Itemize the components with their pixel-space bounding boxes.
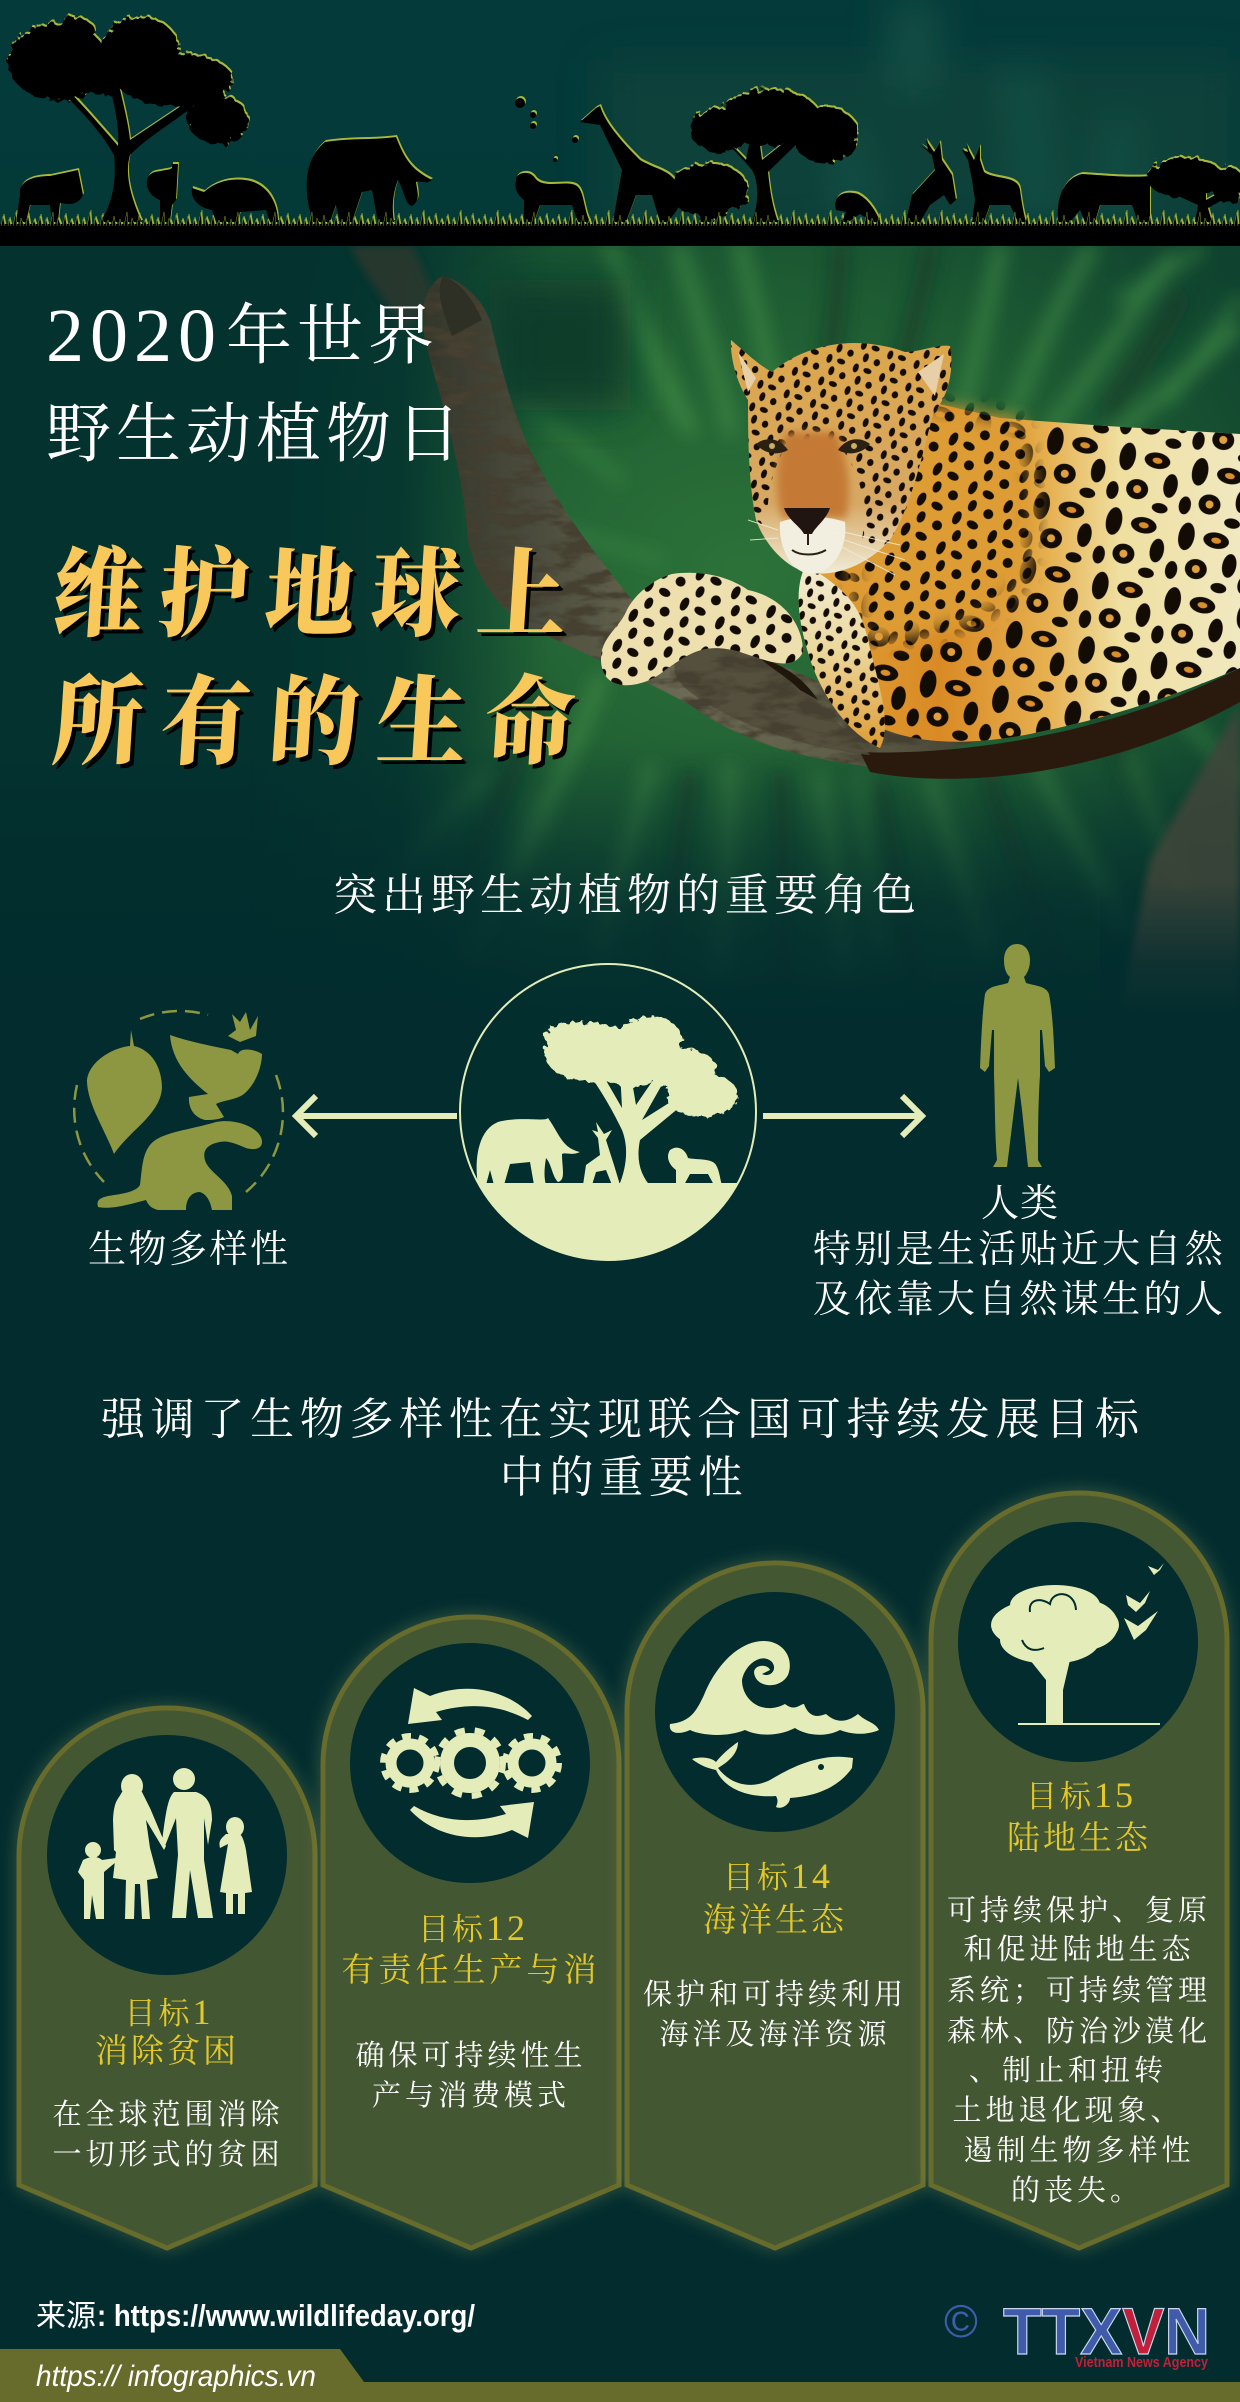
panels: goals bbox=[19, 1493, 1227, 2248]
goal 15 text: 土地退化现象、 bbox=[952, 2094, 1184, 2127]
heading: sustainable goals: 中的重要性 bbox=[500, 1453, 748, 1502]
jaguar face bbox=[777, 432, 849, 518]
goal 14 text bbox=[643, 1978, 907, 2051]
icon: family bbox=[78, 1768, 252, 1919]
goal 12 heading: 有责任生产与消 bbox=[342, 1952, 600, 1989]
heading: sustainable goals: 强调了生物多样性在实现联合国可持续发展目标 bbox=[101, 1395, 1145, 1444]
circle with savanna bbox=[459, 963, 757, 1261]
panel: goal 1 bbox=[19, 1708, 315, 2248]
goal 15 heading: 目标15 bbox=[1026, 1775, 1136, 1815]
goal 12 text: 确保可持续性生 bbox=[355, 2039, 587, 2072]
goal 12 heading bbox=[342, 1908, 600, 1989]
diagram: biodiversity and humans bbox=[74, 944, 1226, 1321]
goal 15 heading: 陆地生态 bbox=[1007, 1820, 1151, 1857]
goal 14 heading bbox=[703, 1856, 847, 1939]
giraffe bbox=[580, 106, 680, 222]
goal 1 text: 在全球范围消除 bbox=[52, 2098, 284, 2131]
goal 12 text: 产与消费模式 bbox=[372, 2079, 570, 2112]
title gold bbox=[50, 542, 597, 778]
goal 15 text: 和促进陆地生态 bbox=[963, 1933, 1195, 1966]
jaguar chest and second leg bbox=[799, 565, 885, 748]
goal 15 text: 遏制生物多样性 bbox=[963, 2134, 1195, 2167]
jaguar front paws bbox=[601, 573, 870, 755]
title white bbox=[46, 294, 466, 471]
grass bbox=[0, 208, 1240, 226]
goal 12 text bbox=[355, 2039, 587, 2112]
panel: goal 15 bbox=[931, 1493, 1227, 2248]
deer one bbox=[906, 140, 956, 222]
jungle photo background bbox=[250, 246, 1240, 1026]
icon: wave and whale bbox=[670, 1641, 879, 1808]
label: biodiversity: 生物多样性 bbox=[88, 1229, 291, 1271]
arrow right bbox=[763, 1096, 922, 1136]
acacia tree left bbox=[8, 18, 248, 222]
panel: goal 14 bbox=[627, 1563, 923, 2248]
acacia tree centre bbox=[668, 90, 858, 222]
label: humans bbox=[813, 1183, 1226, 1321]
icon: tree and birds bbox=[991, 1563, 1164, 1724]
lion bbox=[515, 173, 590, 222]
goal 14 heading: 海洋生态 bbox=[703, 1902, 847, 1939]
jaguar eyes bbox=[756, 439, 870, 453]
jaguar bbox=[601, 340, 1240, 755]
goal 14 text: 海洋及海洋资源 bbox=[659, 2018, 891, 2051]
elephant bbox=[307, 137, 432, 222]
goal 15 text bbox=[947, 1894, 1211, 2207]
goal 14 heading: 目标14 bbox=[723, 1856, 833, 1896]
tree branch bbox=[350, 246, 1240, 779]
lower right tree trunk bbox=[1120, 705, 1240, 1010]
jaguar muzzle bbox=[780, 517, 845, 574]
buffalo bbox=[192, 180, 278, 222]
ground line bbox=[0, 224, 1240, 246]
arrow left bbox=[296, 1096, 457, 1136]
ostrich bbox=[147, 164, 178, 222]
panel: goal 12 bbox=[323, 1617, 619, 2248]
goal 12 heading: 目标12 bbox=[418, 1908, 528, 1948]
goal 1 text bbox=[52, 2098, 284, 2171]
jaguar body bbox=[820, 394, 1240, 742]
elephant right bbox=[1058, 174, 1150, 222]
icon: biodiversity bbox=[74, 1011, 283, 1210]
acacia tree right bbox=[1147, 158, 1240, 222]
goal 15 text: 系统；可持续管理 bbox=[947, 1974, 1211, 2007]
left and lower fades of the photo bbox=[0, 246, 1240, 1040]
website: https:// infographics.vn bbox=[36, 2360, 316, 2393]
title line one: 2020 bbox=[46, 294, 222, 378]
whiskers bbox=[748, 520, 905, 575]
label: humans: 及依靠大自然谋生的人 bbox=[813, 1279, 1226, 1321]
monkey bbox=[835, 193, 880, 222]
source: 来源 bbox=[36, 2300, 96, 2333]
goal 14 text: 保护和可持续利用 bbox=[643, 1978, 907, 2011]
heading: sustainable goals bbox=[101, 1395, 1145, 1502]
icon: human bbox=[980, 944, 1055, 1167]
footer bar bbox=[0, 2349, 1240, 2402]
goal 15 text: 森林、防治沙漠化 bbox=[947, 2015, 1211, 2048]
goal 15 text: 、制止和扭转 bbox=[969, 2054, 1167, 2087]
goal 15 heading bbox=[1007, 1775, 1151, 1857]
goal 1 text: 一切形式的贫困 bbox=[52, 2138, 284, 2171]
logo: TTXVN: © bbox=[944, 2295, 978, 2347]
goal 1 heading bbox=[95, 1992, 239, 2070]
savanna silhouettes bbox=[0, 18, 1240, 226]
logo: TTXVN: Vietnam News Agency bbox=[1075, 2354, 1209, 2371]
label: humans: 人类 bbox=[981, 1183, 1059, 1225]
small birds bbox=[515, 98, 578, 162]
goal 1 heading: 消除贫困 bbox=[95, 2033, 239, 2070]
source: : https://www.wildlifeday.org/ bbox=[97, 2298, 475, 2333]
gold line two: 所有的生命 bbox=[50, 670, 597, 778]
label: humans: 特别是生活贴近大自然 bbox=[813, 1229, 1226, 1271]
heading: roles: 突出野生动植物的重要角色 bbox=[333, 871, 921, 920]
title line one CJK: 年世界 bbox=[226, 300, 439, 373]
jaguar head bbox=[731, 340, 951, 575]
top band forest glow bbox=[600, 0, 1240, 230]
title line two: 野生动植物日 bbox=[46, 399, 466, 471]
wildebeest bbox=[16, 170, 83, 222]
goal 15 text: 的丧失。 bbox=[1011, 2174, 1143, 2207]
gold line one: 维护地球上 bbox=[50, 542, 587, 650]
goal 1 heading: 目标1 bbox=[124, 1992, 214, 2032]
icon: gears and arrows bbox=[383, 1688, 559, 1838]
deer two bbox=[962, 145, 1026, 222]
jaguar nose bbox=[784, 508, 830, 534]
goal 15 text: 可持续保护、复原 bbox=[947, 1894, 1211, 1927]
logo: TTXVN: TTXVN bbox=[1003, 2294, 1210, 2368]
